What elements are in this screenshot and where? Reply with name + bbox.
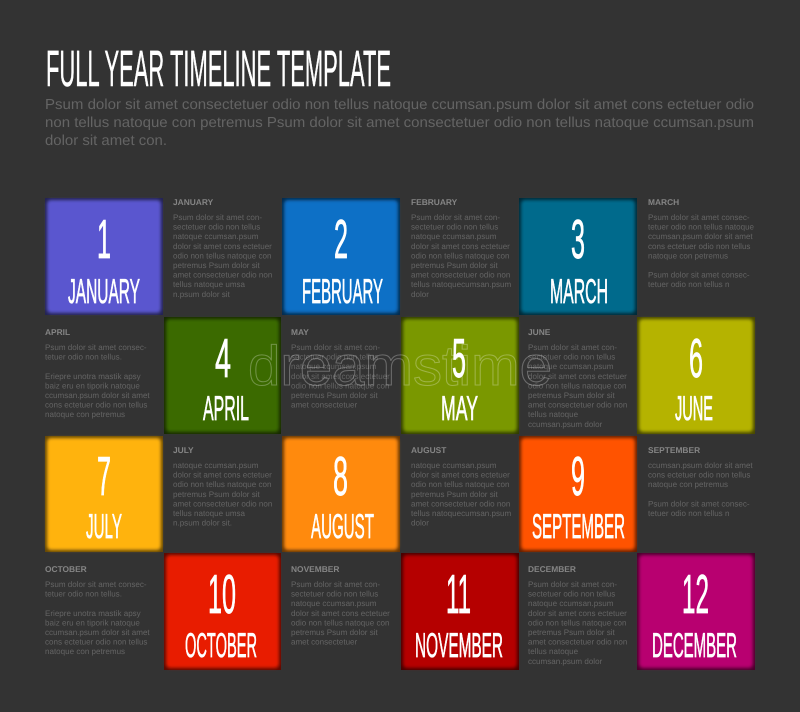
text: February: tellus natoquecumsan.psum [411, 280, 511, 289]
text: August: odio non tellus natoque con [411, 480, 509, 489]
text: January: n.psum dolor sit [173, 290, 231, 299]
watermark: dreamstime [248, 334, 552, 397]
tile: September: 9 [571, 445, 585, 507]
tile: January [45, 198, 163, 315]
text: June: JUNE [528, 327, 551, 337]
intro text block [45, 97, 754, 149]
text: August [411, 445, 511, 528]
text: June [528, 327, 627, 429]
text: June: amet consectetuer odio non [528, 401, 627, 410]
text: SEPTEMBER [532, 508, 625, 546]
text: October: Eriepre unotra mastik apsy [45, 609, 141, 618]
text: April: Eriepre unotra mastik apsy [45, 372, 141, 381]
text: April: cons ectetuer odio non tellus [45, 401, 147, 410]
text: March: tetuer odio non tellus natoque [648, 223, 755, 232]
text: June: odio non tellus natoque con [528, 381, 626, 390]
text: December: ccumsan.psum dolor [528, 657, 603, 666]
text: August: dolor [411, 519, 429, 528]
text: November: NOVEMBER [291, 564, 339, 574]
text: June: dolor sit amet cons ectetuer [528, 372, 627, 381]
text: November: petremus Psum dolor sit [291, 628, 379, 637]
tile: April [164, 317, 281, 434]
text: October: ccumsan.psum dolor sit amet [45, 628, 150, 637]
text: August: natoque ccumsan.psum [411, 461, 497, 470]
text: November: natoque ccumsan.psum [291, 599, 377, 608]
text: June: petremus Psum dolor sit [528, 391, 616, 400]
tile: March: MARCH [550, 273, 608, 311]
tile: November [401, 553, 519, 670]
tile: August: AUGUST [311, 508, 374, 546]
text: October: cons ectetuer odio non tellus [45, 638, 147, 647]
intro text block: dolor sit amet con. [45, 133, 167, 149]
text: December: petremus Psum dolor sit [528, 628, 616, 637]
text: March: ccumsan.psum dolor sit amet [648, 232, 753, 241]
text: January: sectetuer odio non tellus [173, 223, 260, 232]
intro text block: Psum dolor sit amet consectetuer odio non tellus natoque ccumsan.psum dolor sit amet cons ectetuer odio [45, 97, 754, 113]
tile: March: 3 [571, 208, 585, 270]
text: April: Psum dolor sit amet consec- [45, 343, 147, 352]
text: August: AUGUST [411, 445, 447, 455]
text: July: petremus Psum dolor sit [173, 490, 261, 499]
text: September: tetuer odio non tellus n [648, 509, 729, 518]
tile: February [282, 198, 400, 315]
text: May [291, 327, 390, 410]
text: January: odio non tellus natoque con [173, 251, 271, 260]
text: May: dolor sit amet cons ectetuer [291, 372, 390, 381]
tile: November: 11 [446, 563, 471, 625]
tile: October: OCTOBER [185, 627, 257, 665]
text: November [291, 564, 390, 647]
text: January: JANUARY [173, 197, 214, 207]
text: June: natoque ccumsan.psum [528, 362, 614, 371]
text: September [648, 445, 753, 518]
tile: June: 6 [689, 327, 703, 389]
text: June: Psum dolor sit amet con- [528, 343, 617, 352]
tile: August [282, 436, 400, 552]
text: January: dolor sit amet cons ectetuer [173, 242, 272, 251]
tile: June [637, 317, 755, 434]
text: December: amet consectetuer odio non [528, 638, 627, 647]
tile: April: 4 [215, 327, 231, 389]
text: October: natoque con petremus [45, 647, 125, 656]
text: April: APRIL [45, 327, 70, 337]
text: March: cons ectetuer odio non tellus [648, 242, 750, 251]
tile: June: JUNE [675, 390, 713, 428]
text: December [528, 564, 627, 666]
tile: January: 1 [97, 208, 111, 270]
text: November: odio non tellus natoque con [291, 618, 389, 627]
tile: October: 10 [208, 563, 236, 625]
text: November: Psum dolor sit amet con- [291, 580, 380, 589]
text: June: sectetuer odio non tellus [528, 353, 615, 362]
text: October: baiz eru en tiporik natoque [45, 618, 140, 627]
text: February: odio non tellus natoque con [411, 251, 509, 260]
tile: March [519, 198, 637, 315]
text: May: petremus Psum dolor sit [291, 391, 379, 400]
text: March [648, 197, 755, 289]
text: January: tellus natoque umsa [173, 280, 246, 289]
tile: February: FEBRUARY [302, 273, 383, 311]
text: September: natoque con petremus [648, 480, 728, 489]
text: August: amet consectetuer odio non [411, 499, 510, 508]
tile: October [164, 553, 281, 670]
text: April: natoque con petremus [45, 410, 125, 419]
text: February: natoque ccumsan.psum [411, 232, 497, 241]
text: October: Psum dolor sit amet consec- [45, 580, 147, 589]
text: July: n.psum dolor sit. [173, 519, 232, 528]
text: November: amet consectetuer [291, 638, 358, 647]
text: March: natoque con petremus [648, 251, 728, 260]
text: July: dolor sit amet cons ectetuer [173, 471, 272, 480]
text: December: sectetuer odio non tellus [528, 590, 615, 599]
text: March: Psum dolor sit amet consec- [648, 271, 750, 280]
tile: April: APRIL [203, 390, 249, 428]
tile: May: 5 [452, 327, 466, 389]
text: July: JULY [173, 445, 194, 455]
tile: May [401, 317, 519, 434]
text: February: FEBRUARY [411, 197, 458, 207]
text: March: Psum dolor sit amet consec- [648, 213, 750, 222]
text: October: OCTOBER [45, 564, 87, 574]
text: February: petremus Psum dolor sit [411, 261, 499, 270]
tile: July [45, 436, 163, 552]
text: September: SEPTEMBER [648, 445, 700, 455]
text: January: natoque ccumsan.psum [173, 232, 259, 241]
tile: July: JULY [86, 508, 122, 546]
text: August: dolor sit amet cons ectetuer [411, 471, 510, 480]
text: July: odio non tellus natoque con [173, 480, 271, 489]
text: January: petremus Psum dolor sit [173, 261, 261, 270]
text: January: amet consectetuer odio non [173, 271, 272, 280]
tile: November: NOVEMBER [415, 627, 503, 665]
intro text block: non tellus natoque con petremus Psum dolor sit amet consectetuer odio non tellus natoque ccumsan.psum [45, 115, 754, 131]
text: February: Psum dolor sit amet con- [411, 213, 500, 222]
tile: August: 8 [333, 445, 348, 507]
text: October: tetuer odio non tellus. [45, 590, 122, 599]
text: February: amet consectetuer odio non [411, 271, 510, 280]
text: February: dolor sit amet cons ectetuer [411, 242, 510, 251]
text: November: sectetuer odio non tellus [291, 590, 378, 599]
text: February: sectetuer odio non tellus [411, 223, 498, 232]
text: June: ccumsan.psum dolor [528, 420, 603, 429]
text: December: tellus natoque [528, 647, 579, 656]
text: May: MAY [291, 327, 309, 337]
tile: May: MAY [441, 390, 478, 428]
text: October [45, 564, 150, 656]
text: July: amet consectetuer odio non [173, 499, 272, 508]
text: September: cons ectetuer odio non tellus [648, 471, 750, 480]
text: December: Psum dolor sit amet con- [528, 580, 617, 589]
text: May: natoque ccumsan.psum [291, 362, 377, 371]
text: May: odio non tellus natoque con [291, 381, 389, 390]
tile: December: 12 [682, 563, 709, 625]
text: May: Psum dolor sit amet con- [291, 343, 380, 352]
text: August: petremus Psum dolor sit [411, 490, 499, 499]
text: July: natoque ccumsan.psum [173, 461, 259, 470]
text: September: ccumsan.psum dolor sit amet [648, 461, 753, 470]
text: January [173, 197, 272, 299]
text: July [173, 445, 272, 528]
text: June: tellus natoque [528, 410, 579, 419]
text: August: tellus natoquecumsan.psum [411, 509, 511, 518]
text: May: sectetuer odio non tellus [291, 353, 378, 362]
text: December: odio non tellus natoque con [528, 618, 626, 627]
text: May: amet consectetuer [291, 401, 358, 410]
tile: July: 7 [97, 445, 111, 507]
text: July: tellus natoque umsa [173, 509, 246, 518]
text: February: dolor [411, 290, 429, 299]
text: March: MARCH [648, 197, 679, 207]
text: April: ccumsan.psum dolor sit amet [45, 391, 150, 400]
text: December: DECEMBER [528, 564, 576, 574]
text: January: Psum dolor sit amet con- [173, 213, 262, 222]
tile: February: 2 [334, 208, 348, 270]
text: April: baiz eru en tiporik natoque [45, 381, 140, 390]
tile: September [519, 436, 637, 552]
text: February [411, 197, 511, 299]
text: December: dolor sit amet cons ectetuer [528, 609, 627, 618]
text: November: dolor sit amet cons ectetuer [291, 609, 390, 618]
text: March: tetuer odio non tellus n [648, 280, 729, 289]
text: April: tetuer odio non tellus. [45, 353, 122, 362]
tile: December [637, 553, 755, 670]
tile: January: JANUARY [68, 273, 140, 311]
text: December: natoque ccumsan.psum [528, 599, 614, 608]
text: April [45, 327, 150, 419]
text: September: Psum dolor sit amet consec- [648, 499, 750, 508]
